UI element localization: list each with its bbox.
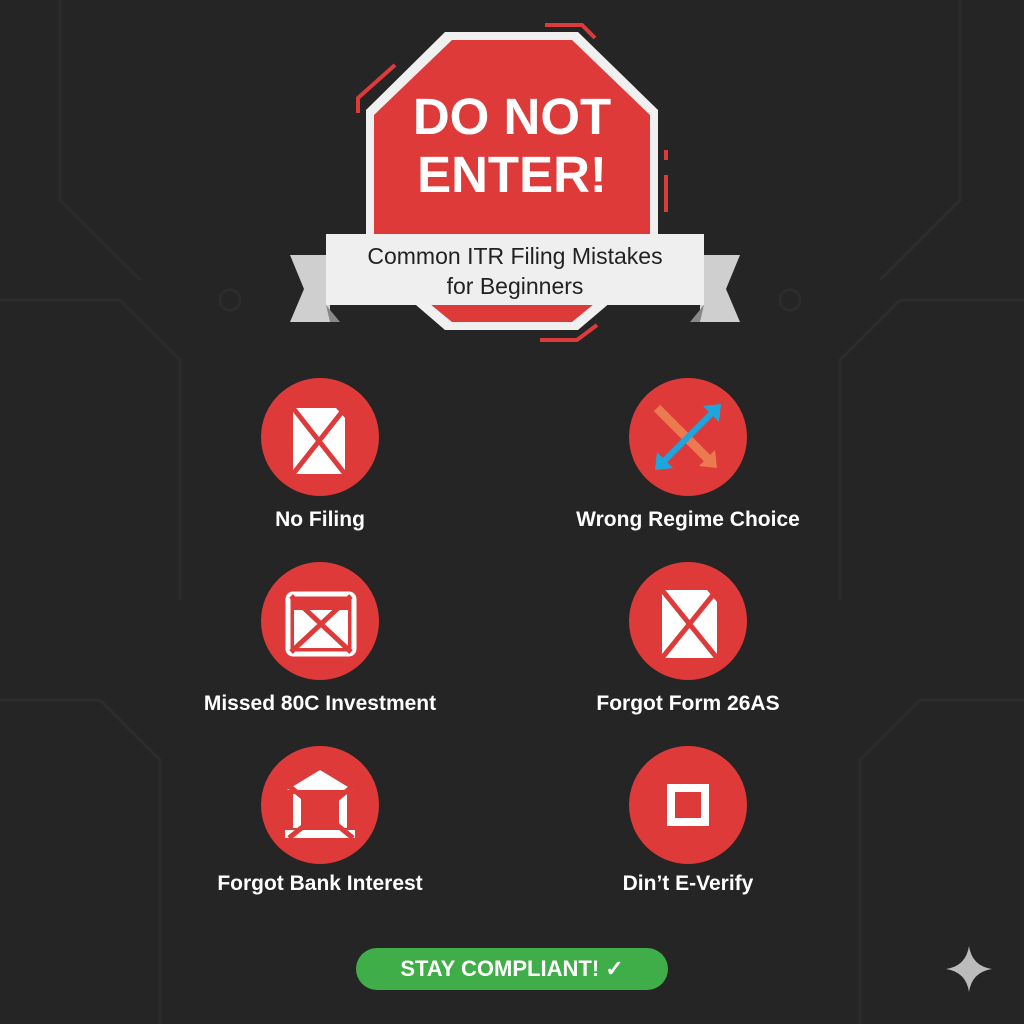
icon: crossed arrows [629, 378, 747, 496]
subtitle: for Beginners [447, 273, 583, 299]
icon: crossed form [629, 562, 747, 680]
item: Forgot Bank Interest [217, 746, 423, 895]
ribbon banner [290, 234, 740, 322]
icon: sparkle [946, 946, 992, 992]
icon: crossed bank [261, 746, 379, 864]
item: Din't E-Verify: Din’t E-Verify [623, 872, 753, 895]
button: stay compliant: STAY COMPLIANT! ✓ [400, 956, 624, 981]
item: Missed 80C Investment: Missed 80C Investment [204, 692, 436, 715]
item: No Filing: No Filing [275, 508, 365, 531]
icon: square [629, 746, 747, 864]
item: Din't E-Verify [623, 746, 754, 895]
item: Forgot Form 26AS [596, 562, 780, 715]
item: Wrong Regime Choice [576, 378, 800, 531]
icon: crossed calendar [261, 562, 379, 680]
subtitle: Common ITR Filing Mistakes [367, 243, 663, 269]
item: No Filing [261, 378, 379, 531]
item: Missed 80C Investment [204, 562, 436, 715]
heading: DO NOT ENTER: DO NOT [413, 88, 611, 145]
icon: crossed document [261, 378, 379, 496]
heading: DO NOT ENTER [413, 88, 611, 203]
heading: DO NOT ENTER: ENTER! [417, 146, 607, 203]
item: Forgot Form 26AS: Forgot Form 26AS [596, 692, 780, 715]
subtitle [367, 243, 663, 299]
button: stay compliant [356, 948, 668, 990]
item: Forgot Bank Interest: Forgot Bank Interest [217, 872, 423, 895]
item: Wrong Regime Choice: Wrong Regime Choice [576, 508, 800, 531]
